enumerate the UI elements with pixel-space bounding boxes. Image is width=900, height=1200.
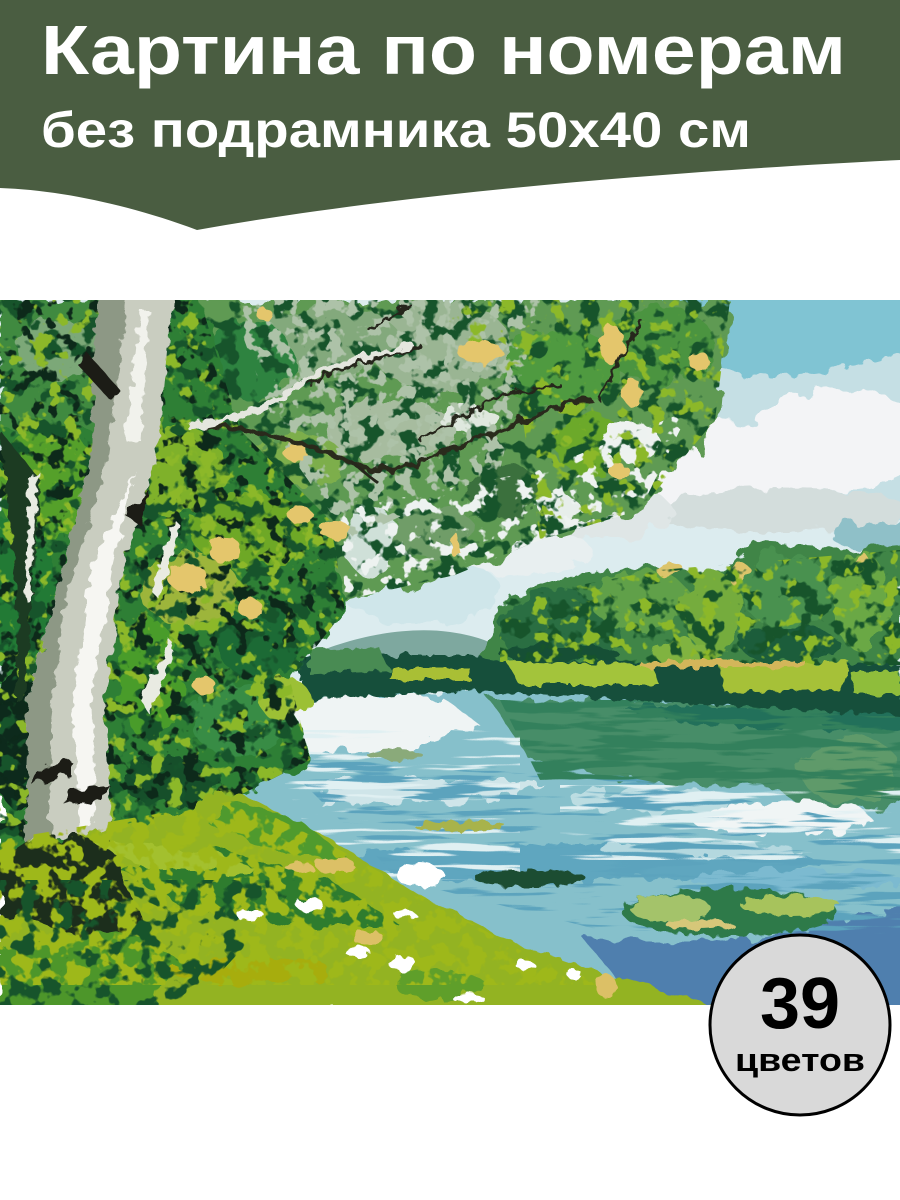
- title: Картина по номерам: [41, 11, 846, 89]
- foreground grass bank: [0, 790, 730, 1010]
- painting: birch tree by the river: [0, 290, 900, 1010]
- left foliage mass: [0, 300, 345, 860]
- left foliage texture: [0, 300, 345, 860]
- white flowers: [236, 863, 583, 1003]
- sky and clouds: [0, 290, 900, 700]
- river: [230, 690, 900, 1010]
- badge number: 39: [760, 964, 840, 1044]
- canopy leaf texture: [200, 300, 730, 600]
- canopy: [198, 300, 734, 602]
- yellow leaf accents: [168, 309, 710, 695]
- far hill: [306, 630, 488, 659]
- grass texture: [0, 800, 610, 1005]
- header banner: [0, 0, 900, 230]
- badge label: цветов: [735, 1042, 865, 1078]
- opposite bank meadow: [300, 648, 900, 715]
- badge: 39 colours: [710, 935, 890, 1115]
- branches: [190, 305, 640, 485]
- river streaks: [260, 700, 900, 935]
- distant tree line: [470, 545, 900, 690]
- birch trunks: [0, 296, 180, 842]
- subtitle: без подрамника 50х40 см: [41, 102, 751, 158]
- sand and leaf dabs: [286, 857, 615, 997]
- lily pads: [367, 750, 840, 936]
- distant tree texture: [500, 550, 900, 665]
